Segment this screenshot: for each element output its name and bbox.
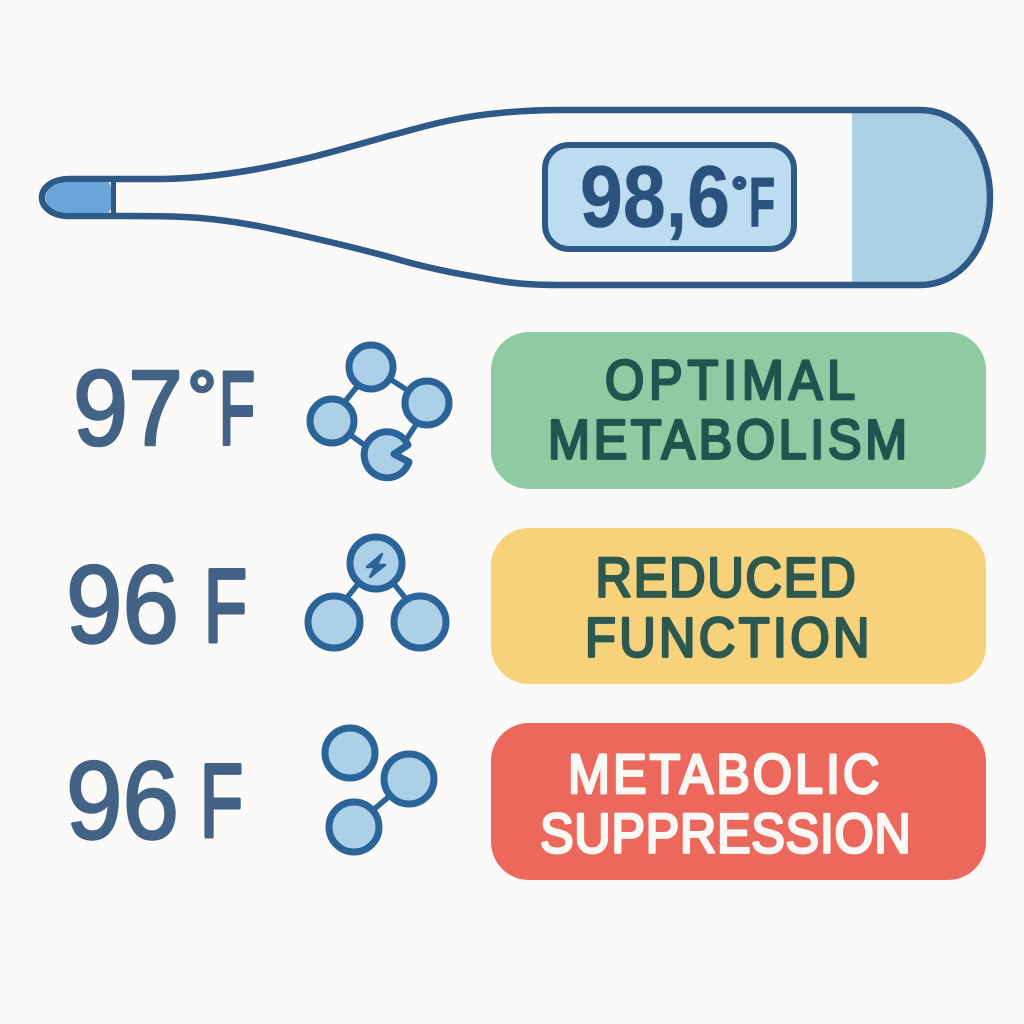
- row 3 status pill: SUPPRESSION: [540, 803, 911, 865]
- thermometer outline: [42, 110, 990, 285]
- row 3 status pill: [491, 723, 986, 880]
- row 3 temperature: [66, 740, 243, 862]
- row 1 temperature: °: [188, 358, 216, 438]
- row 2 molecule icon: [308, 537, 446, 648]
- row 3 molecule icon: [325, 728, 434, 852]
- digital display: °: [732, 170, 747, 211]
- row 1 status pill: [491, 332, 986, 489]
- row 2 status pill: FUNCTION: [585, 607, 869, 669]
- digital display: [545, 145, 794, 249]
- digital display: 98,6: [580, 148, 730, 246]
- row 1 temperature: F: [219, 351, 255, 467]
- row 3 temperature: F: [200, 744, 243, 860]
- row 1 status pill: METABOLISM: [548, 409, 907, 471]
- thermometer end cap fill: [852, 110, 990, 285]
- thermometer tip: [46, 182, 111, 213]
- row 2 status pill: [491, 528, 986, 684]
- row 3 status pill: METABOLIC: [568, 744, 879, 806]
- row 2 status pill: REDUCED: [596, 547, 856, 609]
- row 1 molecule icon: [310, 345, 449, 478]
- thermometer: [42, 110, 990, 285]
- row 2 temperature: [66, 544, 247, 666]
- row 1 temperature: [73, 347, 255, 468]
- digital display: F: [749, 163, 775, 241]
- row 2 temperature: F: [204, 548, 247, 664]
- row 3 temperature: 96: [66, 740, 179, 862]
- row 1 status pill: OPTIMAL: [605, 350, 855, 412]
- row 1 temperature: 97: [73, 347, 183, 468]
- tip divider: [111, 178, 116, 217]
- row 2 temperature: 96: [66, 544, 179, 666]
